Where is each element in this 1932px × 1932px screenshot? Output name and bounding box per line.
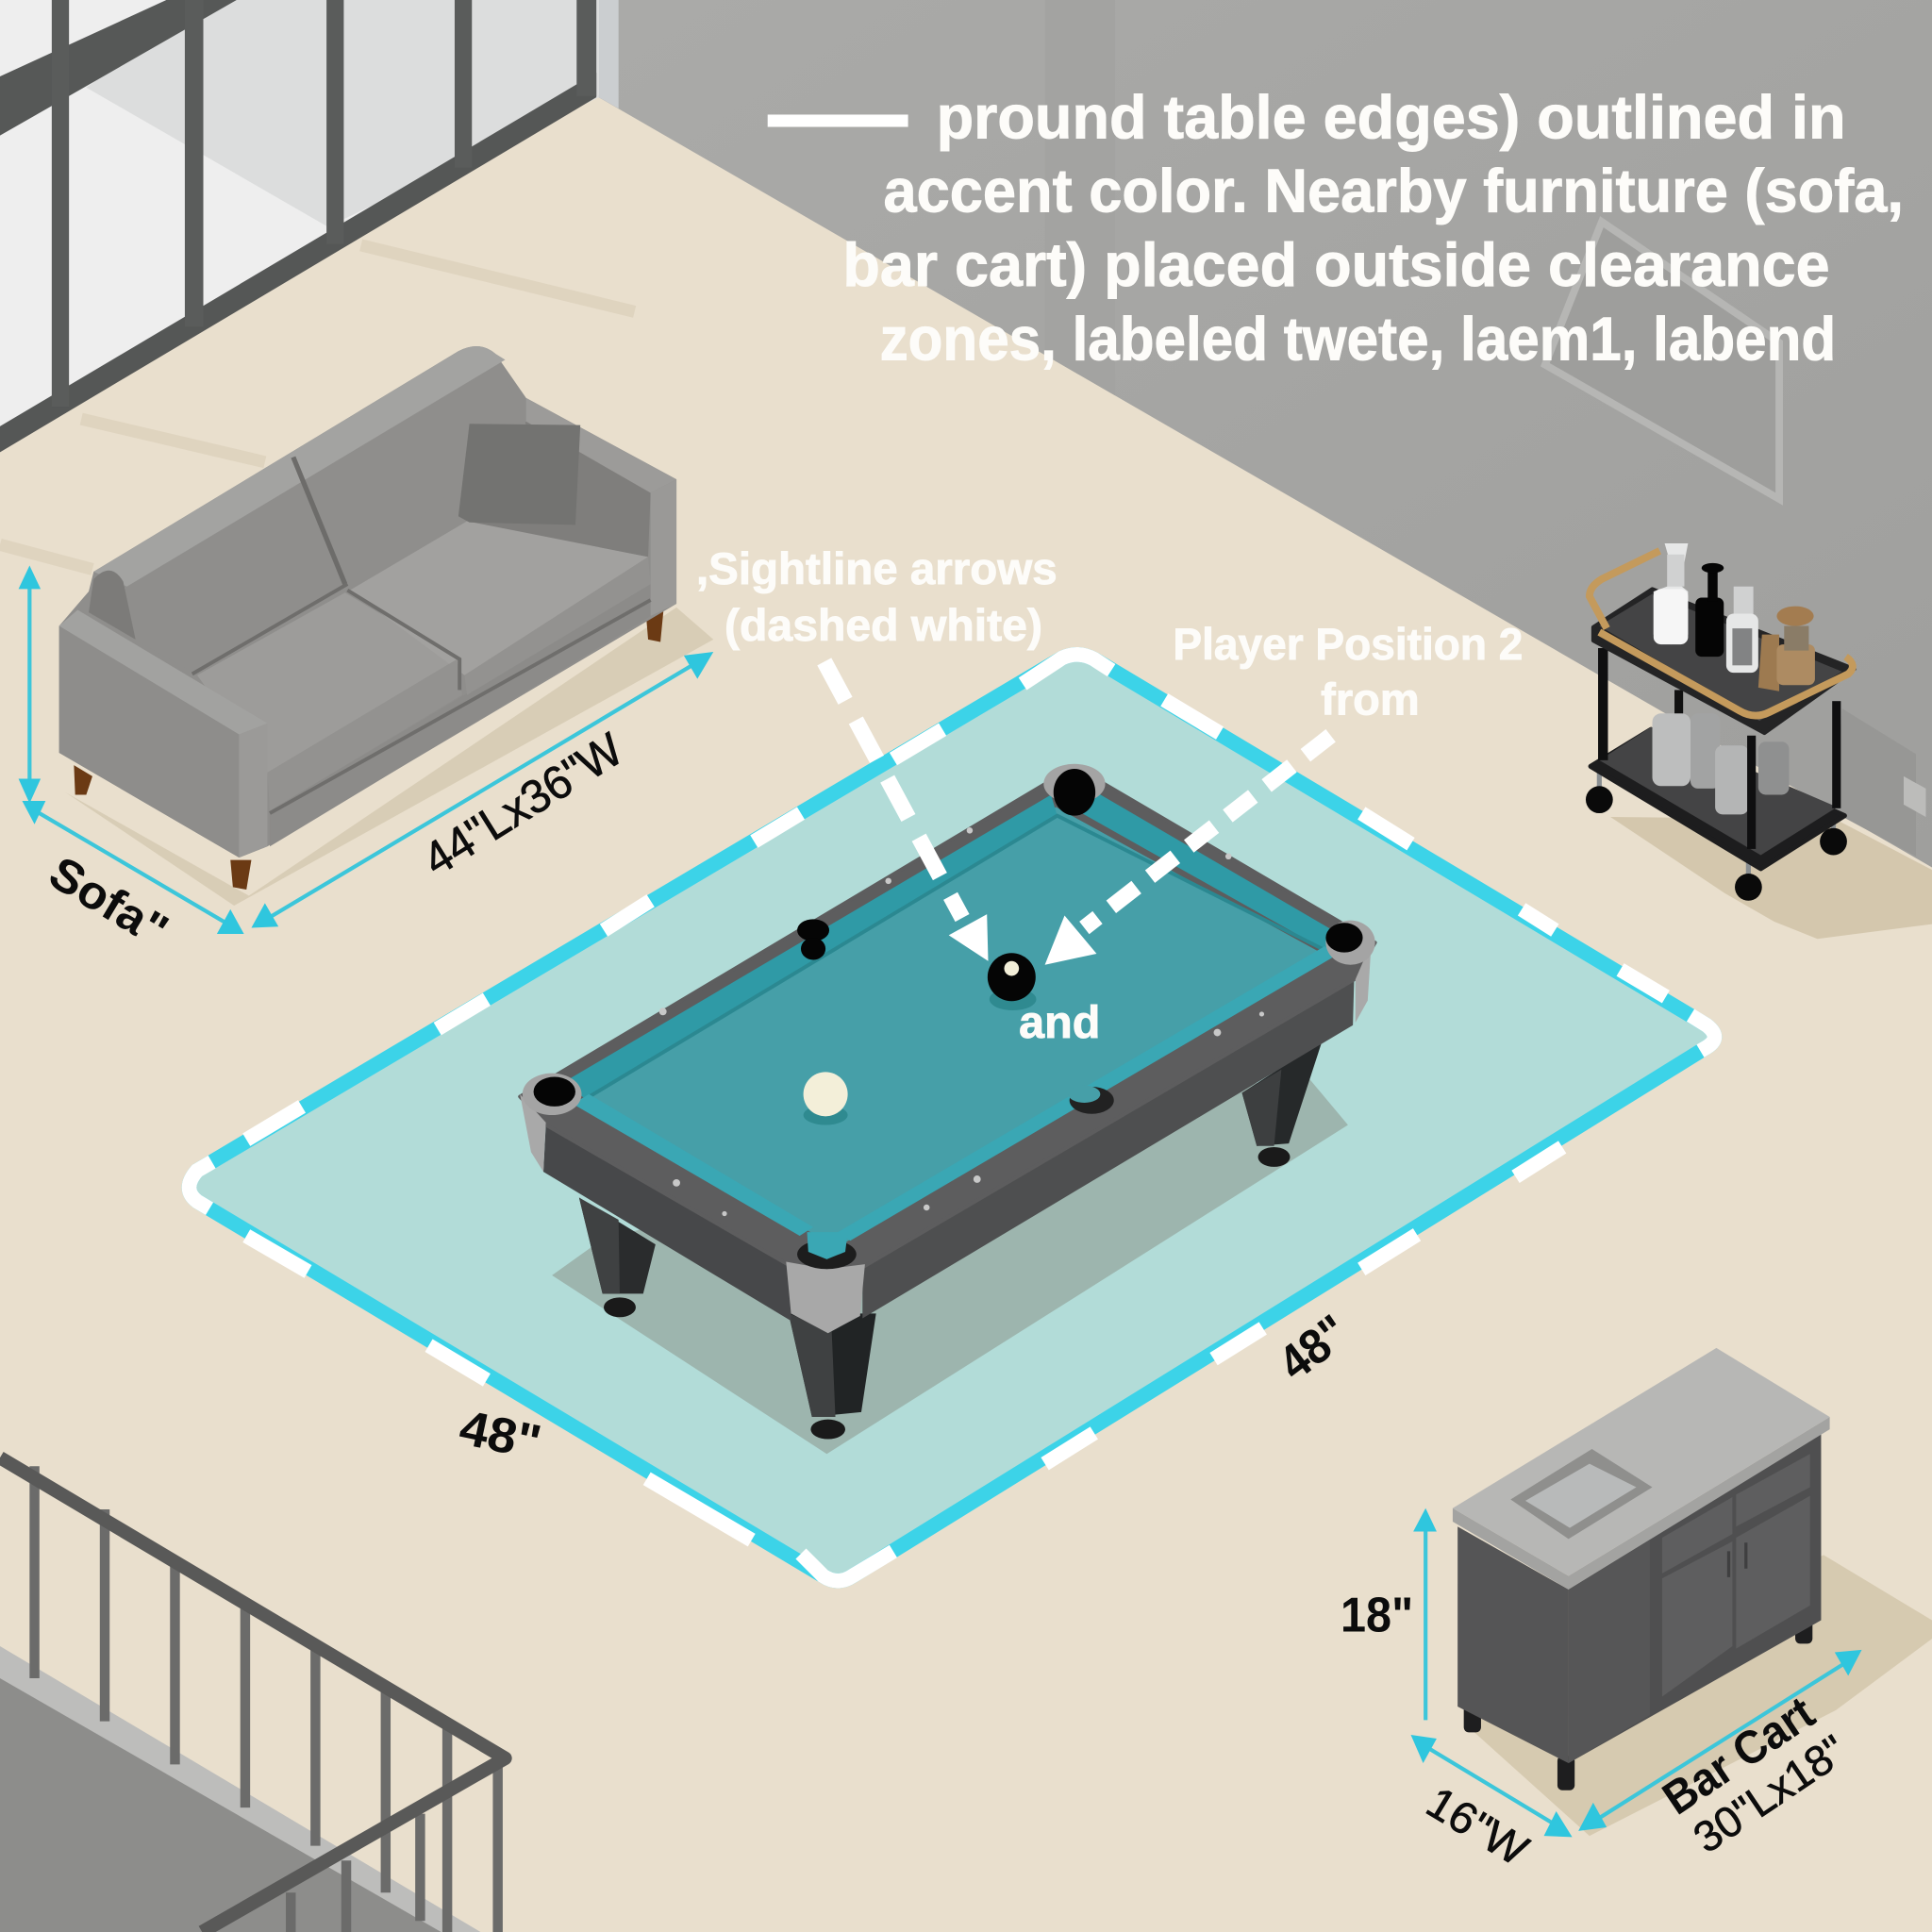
seat cushions <box>197 592 458 773</box>
sightline arrow 2 <box>1045 736 1331 965</box>
wheels <box>1586 786 1847 901</box>
base <box>270 584 651 846</box>
label: bar cart size: 30"Lx18" <box>1685 1725 1855 1862</box>
stairwell opening <box>0 1646 480 1932</box>
table body <box>543 1124 791 1321</box>
front cushions <box>573 1094 813 1236</box>
table rails <box>520 766 1375 1288</box>
label: sofa: Sofa" <box>41 846 177 958</box>
clearance zone <box>189 655 1714 1581</box>
leg: front <box>789 1313 876 1440</box>
pockets <box>523 764 1375 1269</box>
sofa shadow <box>65 608 713 906</box>
diamond sights <box>659 827 1264 1216</box>
front face <box>1569 1433 1821 1763</box>
floor light shadows <box>0 245 635 569</box>
top bottles <box>1654 543 1815 691</box>
label: sightline arrows <box>696 543 1058 650</box>
label: bar depth: 16"W <box>1418 1776 1538 1875</box>
lower bottles <box>1653 713 1789 814</box>
posts <box>1598 648 1840 849</box>
bar island shadow <box>1466 1555 1932 1836</box>
back cushions <box>564 794 1058 1099</box>
leg: back right <box>1242 1041 1322 1167</box>
label: sofa size: 44"Lx36"W <box>414 723 632 886</box>
sightline arrow 1 <box>824 661 989 961</box>
doors and drawers <box>1662 1454 1810 1697</box>
bar island dimension arrows <box>1411 1508 1862 1837</box>
label: bar height: 18" <box>1341 1588 1413 1642</box>
wall shadow of cart <box>1836 708 1916 857</box>
heading text: accent color. Nearby furniture (sofa, <box>883 157 1904 225</box>
label: left clearance 48: 48" <box>455 1400 545 1471</box>
label: and: and <box>1019 997 1100 1048</box>
sofa dimension arrows <box>19 566 713 934</box>
label: player position: from <box>1321 675 1420 724</box>
label: right clearance 48: 48" <box>1269 1305 1358 1391</box>
leg: left <box>579 1198 656 1317</box>
outlet <box>1904 776 1925 817</box>
cue ball <box>804 1072 848 1124</box>
white dashes on clearance outline <box>189 655 1714 1581</box>
label: bar cart: Bar Cart <box>1653 1686 1824 1824</box>
backrest <box>122 362 526 672</box>
cart floor shadow <box>1610 817 1932 939</box>
back post <box>1674 690 1683 724</box>
wheel stems <box>1599 770 1834 882</box>
left arm <box>59 626 239 858</box>
table shadow <box>552 1072 1348 1454</box>
heading text <box>768 82 1904 373</box>
label: sightline arrows: ,Sightline arrows <box>696 543 1058 593</box>
pillow <box>458 424 580 525</box>
label: sightline arrows: (dashed white) <box>724 600 1042 650</box>
corner caps <box>786 1261 865 1333</box>
bar island cabinet <box>1453 1348 1830 1790</box>
right arm <box>526 398 676 492</box>
eight ball <box>988 953 1036 1010</box>
pool table <box>520 764 1375 1440</box>
framed picture on wall <box>1545 222 1779 499</box>
stair railing <box>0 1457 506 1932</box>
countertop <box>1453 1417 1830 1590</box>
label: player position <box>1173 619 1523 724</box>
bar cart on wheels <box>1586 543 1855 901</box>
heading text: pround table edges) outlined in <box>937 82 1846 151</box>
handles <box>1728 1542 1746 1577</box>
lower tray <box>1591 727 1844 869</box>
top tray <box>1593 589 1855 733</box>
sofa silhouette <box>59 346 676 858</box>
label: player position: Player Position 2 <box>1173 619 1523 669</box>
side face <box>1457 1526 1569 1763</box>
heading text: bar cart) placed outside clearance <box>842 230 1830 299</box>
back wall <box>599 0 1932 868</box>
sofa legs <box>74 604 664 890</box>
sink <box>1510 1449 1653 1539</box>
wooden handle and rim <box>1590 551 1853 716</box>
felt <box>573 808 1327 1247</box>
sofa <box>59 346 676 890</box>
feet <box>1464 1614 1812 1790</box>
heading text: zones, labeled twete, laem1, labend <box>880 304 1836 373</box>
window wall <box>0 0 599 452</box>
